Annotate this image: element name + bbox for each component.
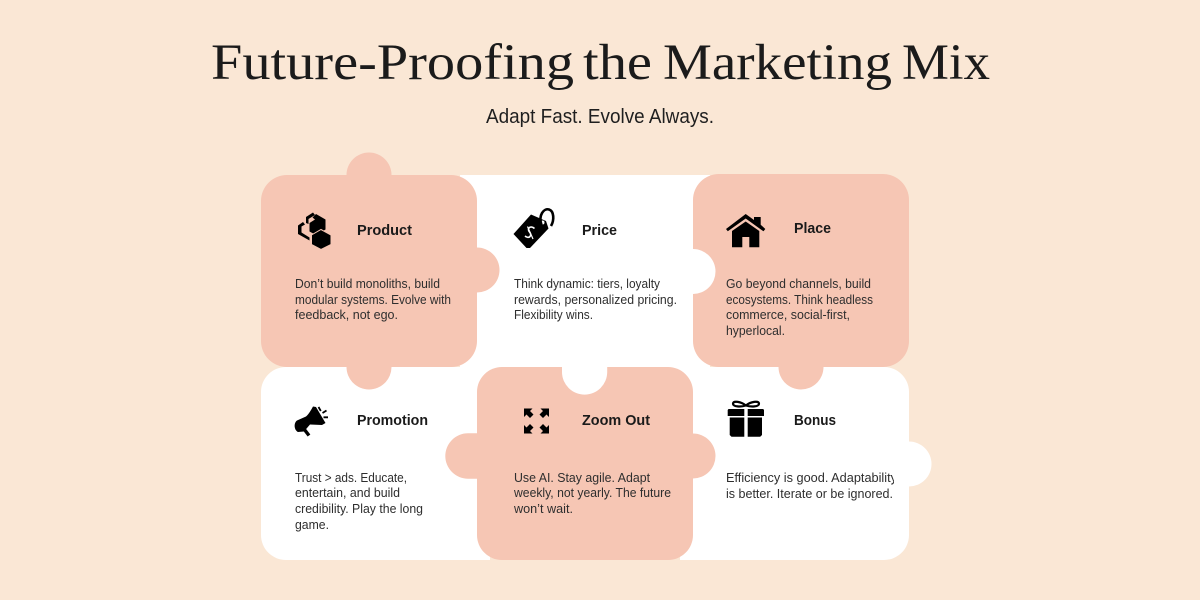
title: Mix (902, 35, 990, 91)
text: price (514, 276, 677, 322)
text: bonus (726, 472, 894, 500)
panel: price background (460, 175, 710, 385)
card: zoom out (513, 408, 671, 516)
text: promotion: credibility. Play the long (295, 501, 423, 516)
card: product (295, 212, 451, 322)
text: bonus: is better. Iterate or be ignored. (726, 486, 893, 501)
text: zoom out: won’t wait. (513, 501, 573, 516)
panel: place (693, 174, 909, 390)
panel: zoom out (445, 367, 716, 560)
text: zoom out (513, 470, 671, 516)
card: place (726, 214, 873, 338)
title: Marketing (663, 35, 892, 91)
text: place: Go beyond channels, build (726, 276, 871, 291)
text: product: feedback, not ego. (295, 307, 398, 322)
card: promotion (295, 406, 428, 532)
notch from price piece (562, 367, 607, 395)
heading: price: Price (582, 222, 617, 239)
text: place: commerce, social-first, (726, 307, 850, 322)
title (211, 35, 990, 91)
heading: zoom out: Zoom Out (582, 412, 650, 429)
subtitle: Adapt Fast. Evolve Always. (486, 106, 714, 128)
heading: place: Place (794, 220, 831, 237)
heading: product: Product (357, 222, 412, 239)
text: place: ecosystems. Think headless (726, 292, 873, 307)
heading: bonus: Bonus (794, 412, 836, 429)
text: price: Flexibility wins. (514, 307, 593, 322)
text: place (726, 276, 873, 338)
text: place: hyperlocal. (726, 323, 785, 338)
icon: cubes (298, 212, 331, 250)
text: zoom out: weekly, not yearly. The future (513, 485, 671, 500)
text: product: modular systems. Evolve with (295, 292, 451, 307)
icon: gift (728, 402, 764, 437)
zoom out puzzle piece (445, 367, 716, 560)
title: Future-Proofing (211, 35, 574, 91)
card: price (514, 209, 677, 322)
notch from price piece (693, 249, 716, 294)
card: bonus (726, 402, 897, 501)
text: promotion (295, 470, 423, 532)
text: product: Don’t build monoliths, build (295, 276, 440, 291)
icon: price tag (514, 209, 553, 248)
heading: promotion: Promotion (357, 412, 428, 429)
panel: product puzzle piece (261, 153, 500, 389)
text: promotion: Trust > ads. Educate, (295, 470, 407, 485)
title: the (583, 35, 652, 91)
panel: bonus background with tab (680, 367, 932, 560)
text: price: rewards, personalized pricing. (514, 292, 677, 307)
place puzzle piece (693, 174, 909, 390)
icon: house (726, 214, 765, 247)
text: bonus: Efficiency is good. Adaptability (726, 470, 897, 485)
icon: expand arrows (524, 408, 549, 434)
text: promotion: game. (295, 517, 329, 532)
text: product (295, 276, 451, 322)
icon: megaphone (295, 406, 328, 436)
text: promotion: entertain, and build (295, 485, 400, 500)
text: price: Think dynamic: tiers, loyalty (514, 276, 660, 291)
panel: promotion background (261, 367, 490, 560)
text: zoom out: Use AI. Stay agile. Adapt (514, 470, 650, 485)
